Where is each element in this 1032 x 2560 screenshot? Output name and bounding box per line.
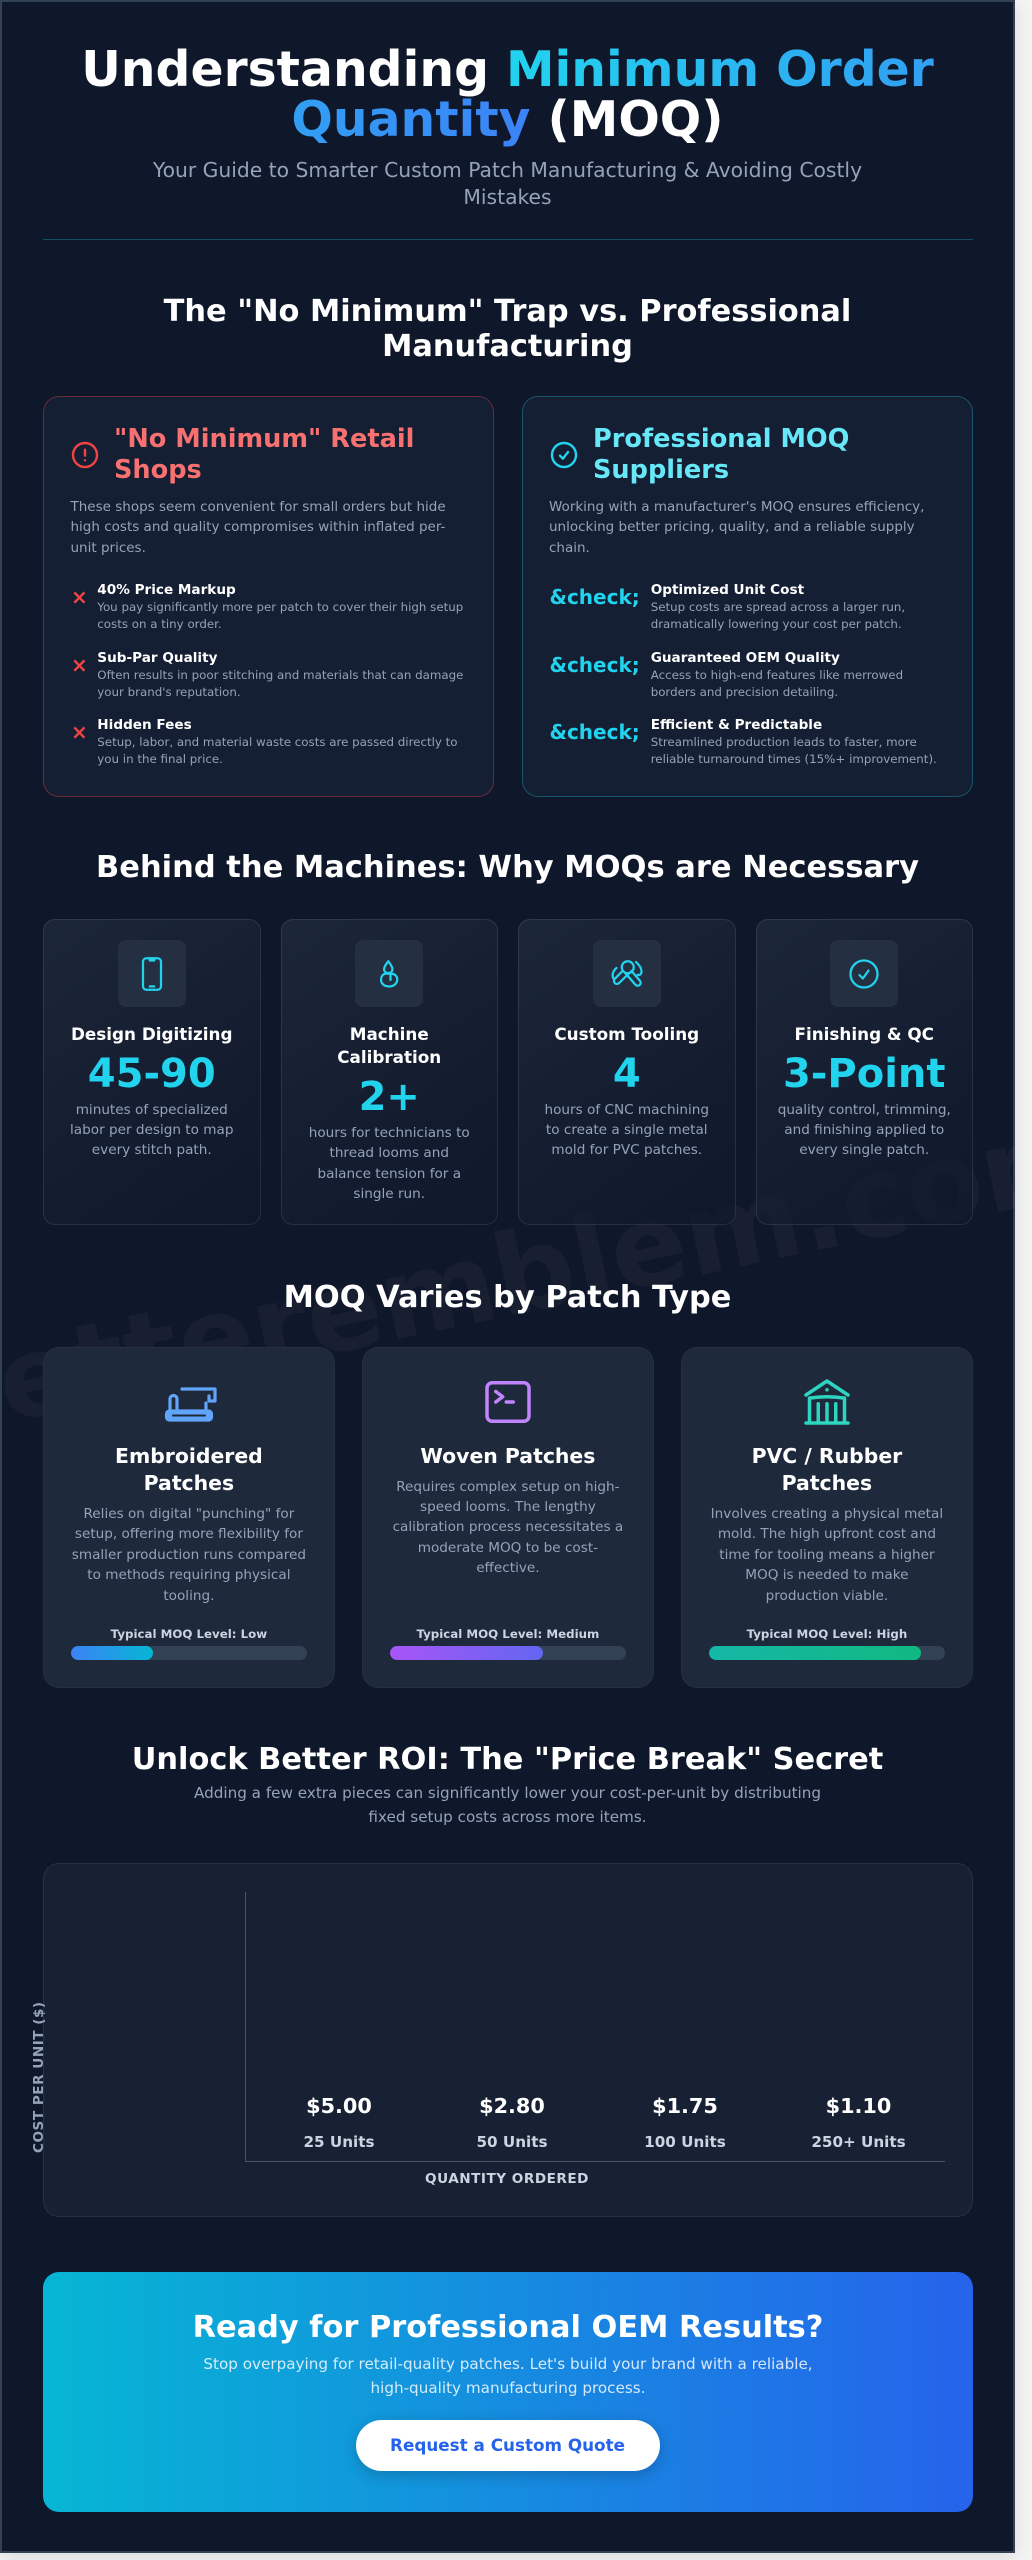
panel: woven patches: calibration process necessitates a — [393, 1519, 623, 1535]
panel: design digitizing: 45-90 — [88, 1050, 216, 1096]
text: retail intro: unit prices. — [70, 540, 146, 556]
chart: price break — [43, 1863, 973, 2216]
panel: custom tooling: to create a single metal — [546, 1122, 708, 1138]
bar label: 250+ units: $1.10 — [826, 2094, 891, 2118]
title — [81, 41, 934, 148]
panel: embroidered patches: Relies on digital "punching" for — [83, 1506, 294, 1522]
item: efficient and predictable: Streamlined production leads to faster, more — [651, 735, 917, 749]
text: supplier intro: Working with a manufacturer's MOQ ensures efficiency, — [549, 499, 924, 515]
panel: machine calibration: 2+ — [359, 1074, 420, 1120]
text: retail intro — [70, 499, 446, 556]
item: sub-par quality: Often results in poor stitching and materials that can damage — [97, 668, 463, 682]
item: sub-par quality: Sub-Par Quality — [97, 650, 217, 666]
item: optimized unit cost: Setup costs are spread across a larger run, — [651, 600, 905, 614]
text: cta — [203, 2354, 813, 2396]
panel: custom tooling: hours of CNC machining — [544, 1102, 709, 1118]
item: optimized unit cost — [550, 582, 905, 631]
item: sub-par quality: × — [71, 653, 88, 677]
panel: embroidered patches — [43, 1347, 335, 1688]
heading: no minimum trap: The "No Minimum" Trap vs. Professional — [164, 294, 851, 328]
bar label: 25 units — [303, 2094, 375, 2151]
panel: design digitizing: Design Digitizing — [71, 1024, 233, 1044]
text: cta: Stop overpaying for retail-quality patches. Let's build your brand with a reliable, — [203, 2354, 813, 2372]
icon: check circle — [550, 442, 578, 468]
panel: machine calibration — [280, 919, 498, 1225]
bar label: 50 units: $2.80 — [479, 2094, 545, 2118]
item: hidden fees: you in the final price. — [97, 752, 223, 766]
title: Understanding Minimum Order — [81, 41, 934, 98]
button: request quote: Request a Custom Quote — [390, 2435, 625, 2455]
item: efficient and predictable: &check; — [550, 720, 640, 744]
panel: woven patches: Requires complex setup on high- — [396, 1478, 620, 1494]
panel: finishing and qc: quality control, trimming, — [778, 1102, 951, 1118]
button: request quote — [356, 2420, 660, 2471]
item: price markup: costs on a tiny order. — [97, 617, 222, 631]
panel: custom tooling: mold for PVC patches. — [551, 1142, 702, 1158]
panel: pvc rubber patches: time for tooling means a higher — [719, 1547, 935, 1563]
panel: machine calibration: Calibration — [337, 1047, 441, 1067]
heading: no minimum trap — [164, 294, 851, 364]
icon: warning circle — [72, 442, 98, 468]
bar label: 25 units: $5.00 — [306, 2094, 372, 2118]
item: guaranteed oem quality: borders and precision detailing. — [651, 685, 838, 699]
icon: command line — [485, 1381, 531, 1423]
heading: moq suppliers — [593, 424, 849, 485]
subtitle: Your Guide to Smarter Custom Patch Manufacturing & Avoiding Costly — [153, 158, 862, 182]
icon: check circle — [830, 940, 898, 1007]
subtitle: Mistakes — [463, 185, 552, 209]
panel: woven patches — [362, 1347, 654, 1688]
item: price markup: 40% Price Markup — [97, 582, 236, 598]
item: efficient and predictable: Efficient & Predictable — [651, 717, 822, 733]
text: roi intro: Adding a few extra pieces can significantly lower your cost-per-unit by distributing — [194, 1784, 821, 1802]
panel: call to action — [43, 2272, 973, 2512]
panel: machine calibration: Machine — [350, 1024, 429, 1044]
panel: embroidered patches: Embroidered — [115, 1444, 263, 1468]
heading: retail shops: Shops — [114, 455, 202, 485]
panel: design digitizing: minutes of specialized — [76, 1102, 228, 1118]
panel: embroidered patches: Typical MOQ Level: Low — [111, 1627, 267, 1641]
panel: finishing and qc: Finishing & QC — [795, 1024, 934, 1044]
item: optimized unit cost: dramatically lowering your cost per patch. — [651, 617, 902, 631]
panel: pvc rubber patches: MOQ is needed to make — [745, 1567, 908, 1583]
panel: custom tooling: 4 — [613, 1050, 641, 1096]
text: roi intro — [194, 1784, 821, 1826]
panel: embroidered patches: tooling. — [163, 1588, 214, 1604]
panel: machine calibration: thread looms and — [329, 1145, 449, 1161]
icon: embroidery machine — [164, 1387, 217, 1422]
panel: woven patches: effective. — [476, 1560, 540, 1576]
text: roi intro: fixed setup costs across more items. — [368, 1808, 647, 1826]
panel: machine calibration: hours for technicians to — [309, 1125, 470, 1141]
item: sub-par quality: your brand's reputation. — [97, 685, 241, 699]
item: optimized unit cost: Optimized Unit Cost — [651, 582, 804, 598]
item: hidden fees: Hidden Fees — [97, 717, 192, 733]
item: guaranteed oem quality: &check; — [550, 653, 640, 677]
icon: tools — [593, 940, 661, 1007]
panel: finishing and qc: every single patch. — [799, 1142, 929, 1158]
panel: woven patches: Woven Patches — [420, 1444, 595, 1468]
bar label: 250+ units: 250+ Units — [811, 2133, 906, 2151]
text: supplier intro: chain. — [549, 540, 590, 556]
panel: design digitizing — [43, 919, 260, 1225]
meter: low — [70, 1646, 307, 1660]
item: optimized unit cost: &check; — [550, 585, 640, 609]
panel: finishing and qc: and finishing applied to — [784, 1122, 944, 1138]
panel: woven patches: moderate MOQ to be cost- — [418, 1540, 598, 1556]
bar label: 50 units: 50 Units — [476, 2133, 548, 2151]
item: hidden fees: Setup, labor, and material waste costs are passed directly to — [97, 735, 458, 749]
heading: behind the machines: Behind the Machines: Why MOQs are Necessary — [96, 850, 919, 885]
panel: pvc rubber patches: mold. The high upfront cost and — [718, 1526, 936, 1542]
heading: moq varies: MOQ Varies by Patch Type — [284, 1280, 731, 1315]
axis label: quantity ordered: QUANTITY ORDERED — [425, 2171, 589, 2187]
panel: no minimum retail shops — [43, 396, 494, 797]
item: guaranteed oem quality — [550, 650, 903, 699]
title: Quantity (MOQ) — [291, 90, 724, 148]
panel: custom tooling: Custom Tooling — [554, 1024, 699, 1044]
panel: design digitizing: labor per design to map — [70, 1122, 233, 1138]
bar label: 250+ units — [811, 2094, 906, 2151]
panel: custom tooling — [518, 919, 736, 1225]
panel: finishing and qc — [756, 919, 973, 1225]
panel: embroidered patches: to methods requiring physical — [87, 1567, 290, 1583]
icon: phone — [118, 940, 186, 1007]
panel: machine calibration: balance tension for a — [317, 1166, 461, 1182]
item: hidden fees: × — [71, 720, 88, 744]
item: price markup: × — [71, 585, 88, 609]
text: supplier intro: unlocking better pricing, quality, and a reliable supply — [549, 519, 915, 535]
text: retail intro: These shops seem convenient for small orders but hide — [70, 499, 446, 515]
heading: cta: Ready for Professional OEM Results? — [193, 2310, 823, 2345]
heading: moq suppliers: Professional MOQ — [593, 424, 849, 454]
panel: pvc rubber patches: Involves creating a physical metal — [711, 1506, 943, 1522]
panel: woven patches: speed looms. The lengthy — [420, 1499, 596, 1515]
heading: retail shops: "No Minimum" Retail — [114, 424, 414, 454]
panel: pvc rubber patches: PVC / Rubber — [752, 1444, 902, 1468]
bar label: 50 units — [476, 2094, 548, 2151]
icon: building — [804, 1379, 850, 1425]
text: supplier intro — [549, 499, 924, 556]
text: retail intro: high costs and quality compromises within inflated per- — [70, 519, 445, 535]
panel: design digitizing: every stitch path. — [92, 1142, 212, 1158]
panel: pvc rubber patches — [681, 1347, 973, 1688]
item: sub-par quality — [71, 650, 463, 699]
item: price markup — [71, 582, 463, 631]
axis label: cost per unit: COST PER UNIT ($) — [30, 2001, 46, 2153]
bar label: 25 units: 25 Units — [303, 2133, 375, 2151]
item: efficient and predictable — [550, 717, 937, 766]
icon: thread spool — [355, 940, 423, 1007]
panel: pvc rubber patches: Patches — [782, 1471, 872, 1495]
subtitle — [152, 158, 862, 209]
text: cta: high-quality manufacturing process. — [370, 2378, 646, 2396]
panel: embroidered patches: Patches — [144, 1471, 234, 1495]
heading: no minimum trap: Manufacturing — [382, 328, 633, 364]
item: guaranteed oem quality: Guaranteed OEM Quality — [651, 650, 840, 666]
meter: high — [708, 1646, 945, 1660]
item: price markup: You pay significantly more per patch to cover their high setup — [97, 600, 463, 614]
heading: moq suppliers: Suppliers — [593, 455, 729, 485]
item: guaranteed oem quality: Access to high-end features like merrowed — [651, 668, 903, 682]
panel: woven patches: Typical MOQ Level: Medium — [416, 1627, 599, 1641]
panel: finishing and qc: 3-Point — [783, 1050, 946, 1096]
panel: pvc rubber patches: production viable. — [766, 1588, 888, 1604]
heading: unlock better roi: Unlock Better ROI: The "Price Break" Secret — [132, 1742, 883, 1776]
bar label: 100 units — [644, 2094, 726, 2151]
meter: medium — [390, 1646, 626, 1660]
item: efficient and predictable: reliable turnaround times (15%+ improvement). — [651, 752, 937, 766]
panel: embroidered patches: smaller production runs compared — [72, 1547, 306, 1563]
bar label: 100 units: $1.75 — [652, 2094, 718, 2118]
panel: embroidered patches: setup, offering more flexibility for — [75, 1526, 303, 1542]
heading: retail shops — [114, 424, 414, 485]
panel: machine calibration: single run. — [353, 1186, 425, 1202]
panel: professional moq suppliers — [522, 396, 973, 797]
panel: pvc rubber patches: Typical MOQ Level: High — [747, 1627, 907, 1641]
bar label: 100 units: 100 Units — [644, 2133, 726, 2151]
item: hidden fees — [71, 717, 458, 766]
